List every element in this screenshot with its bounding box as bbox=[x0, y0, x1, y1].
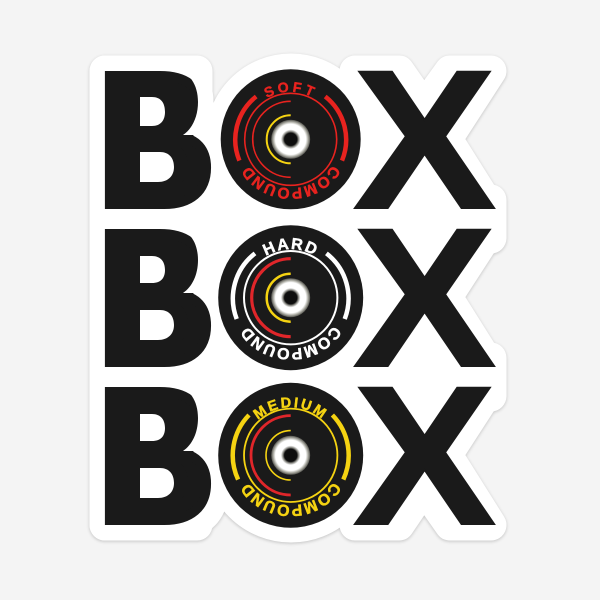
row 1: letter B: B bbox=[98, 36, 214, 244]
icon: medium compound tyre: COMPOUND bbox=[242, 484, 340, 516]
icon: soft compound tyre: COMPOUND bbox=[243, 167, 340, 199]
row 3: letter X: X bbox=[353, 344, 496, 566]
icon: medium compound tyre bbox=[218, 382, 364, 528]
icon: hard compound tyre: COMPOUND bbox=[242, 328, 340, 360]
icon: hard compound tyre bbox=[218, 225, 364, 370]
sticker backing bbox=[105, 69, 491, 527]
icon: soft compound tyre: SOFT bbox=[264, 82, 316, 97]
icon: hard compound tyre: HARD bbox=[262, 238, 317, 256]
row 3: letter B: B bbox=[98, 352, 214, 560]
row 2: letter B: B bbox=[98, 194, 214, 402]
row 2: letter X: X bbox=[353, 186, 496, 408]
icon: medium compound tyre: MEDIUM bbox=[252, 397, 328, 420]
row 1: letter X: X bbox=[353, 28, 496, 250]
icon: soft compound tyre bbox=[220, 69, 361, 210]
